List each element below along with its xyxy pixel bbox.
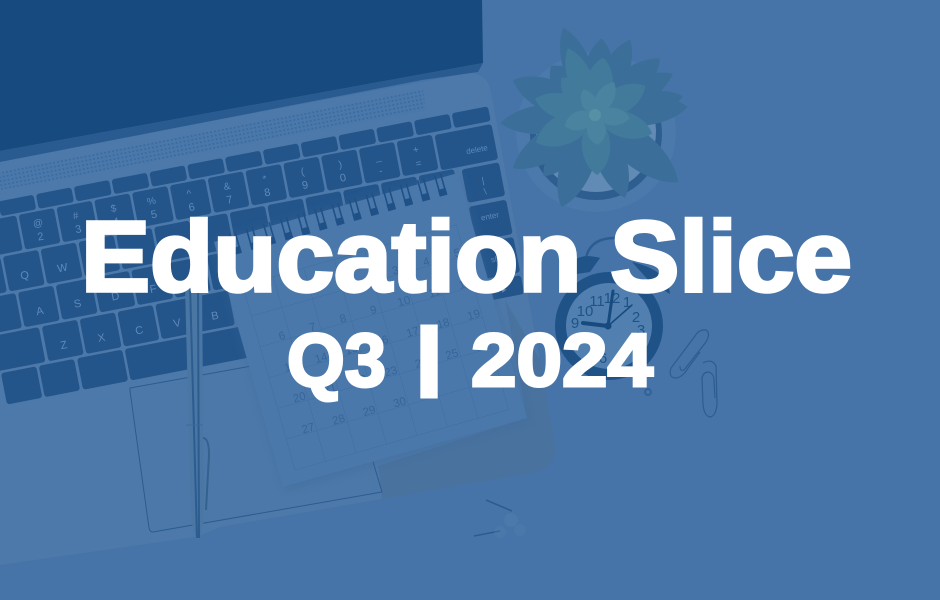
key labels: #: [72, 210, 80, 222]
push pins: [474, 500, 526, 538]
pin heads: [504, 513, 518, 527]
outer leaves: [499, 23, 689, 213]
middle leaves: [530, 44, 656, 175]
subtitle: 2024: [471, 318, 653, 402]
key labels: C: [134, 324, 144, 338]
key labels: 9: [301, 179, 309, 192]
key labels: ^: [186, 189, 193, 200]
leaf core: [589, 109, 601, 121]
key labels: +: [412, 144, 420, 156]
clock numerals: 12: [604, 290, 620, 307]
subtitle: |: [419, 316, 439, 395]
key labels: 6: [188, 201, 196, 214]
keyboard: [0, 106, 526, 414]
calendar grid and dates: 10: [396, 294, 412, 309]
calendar grid and dates: 20: [292, 391, 307, 406]
key labels: X: [97, 332, 107, 345]
key labels: E: [96, 255, 105, 268]
paperclip 1: [670, 330, 708, 378]
subtitle: Q3: [287, 318, 386, 402]
speaker grille: [0, 90, 426, 190]
key labels: \: [483, 186, 488, 197]
calendar grid and dates: 9: [369, 304, 378, 317]
calendar grid and dates: 26: [475, 339, 490, 354]
key labels: ): [338, 159, 343, 171]
calendar page: [214, 173, 527, 487]
paperclip 2: [702, 361, 717, 417]
calendar grid and dates: 19: [466, 308, 482, 323]
key labels: 4: [112, 216, 120, 229]
key labels: S: [73, 298, 82, 311]
clock numerals: 10: [577, 303, 593, 320]
key labels: |: [481, 175, 485, 186]
key labels: B: [210, 310, 220, 323]
clock face: [566, 283, 652, 369]
key labels: @: [32, 217, 44, 230]
clock hands: [583, 291, 632, 329]
clock foot: [645, 389, 651, 395]
key labels: =: [415, 158, 423, 170]
clock numerals: 1: [623, 294, 631, 311]
calendar grid and dates: 24: [414, 356, 430, 371]
trackpad: [130, 350, 382, 532]
key labels: A: [35, 305, 45, 318]
calendar grid and dates: 22: [353, 373, 368, 388]
key labels: &: [223, 181, 232, 193]
calendar grid and dates: 17: [405, 325, 421, 340]
calendar grid and dates: 14: [314, 351, 330, 366]
key labels: 3: [74, 223, 83, 236]
calendar grid and dates: 8: [338, 313, 348, 326]
key labels: %: [146, 196, 157, 208]
ring holes: [232, 188, 447, 255]
pen: [185, 285, 209, 539]
laptop: [0, 0, 555, 565]
calendar grid and dates: [243, 225, 509, 470]
pen clip: [203, 438, 209, 510]
calendar grid and dates: 16: [375, 334, 390, 349]
plant: [499, 23, 689, 213]
inner leaves: [562, 78, 631, 146]
calendar grid and dates: 6: [277, 330, 287, 343]
calendar grid and dates: 12: [457, 277, 473, 292]
key labels: 5: [150, 209, 158, 221]
calendar: [214, 173, 530, 491]
hinge: [0, 63, 483, 162]
paperclips: [670, 330, 717, 417]
pot: [516, 52, 676, 212]
clock numerals: 9: [571, 315, 579, 332]
key labels: D: [110, 290, 121, 304]
key labels: enter: [480, 210, 500, 223]
key labels: [10, 131, 516, 384]
subtitle: [287, 316, 653, 402]
pebbles: [536, 72, 656, 192]
calendar grid and dates: 13: [283, 360, 299, 375]
calendar grid and dates: 28: [331, 413, 347, 428]
clock numerals: [571, 290, 645, 367]
clock numerals: 11: [589, 293, 605, 310]
key labels: V: [172, 317, 183, 330]
clock body: [555, 272, 663, 380]
key labels: ▶: [502, 287, 508, 294]
key labels: -: [378, 166, 384, 177]
clock handle and bells: [586, 238, 646, 262]
calendar grid and dates: 5: [453, 247, 462, 260]
key labels: delete: [465, 143, 489, 156]
laptop lower shade: [378, 300, 555, 499]
calendar shadow: [214, 173, 530, 491]
key labels: Z: [59, 339, 69, 352]
key labels: *: [262, 174, 268, 186]
calendar grid and dates: 15: [344, 342, 360, 357]
key labels: (: [300, 167, 306, 178]
calendar grid and dates: 7: [308, 321, 317, 334]
title: Education Slice: [81, 201, 852, 313]
calendar grid and dates: 27: [301, 421, 316, 436]
key labels: 0: [339, 172, 347, 185]
key labels: F: [149, 283, 158, 296]
laptop body: [0, 73, 555, 565]
calendar grid and dates: 3: [391, 264, 400, 278]
key labels: $: [110, 203, 118, 215]
key labels: 7: [225, 194, 234, 207]
clock numerals: 3: [637, 322, 645, 339]
key labels: T: [162, 242, 171, 255]
key labels: W: [56, 261, 69, 275]
calendar grid and dates: 23: [383, 365, 399, 380]
key labels: R: [124, 249, 134, 262]
alarm clock: [555, 238, 670, 395]
calendar spiral rings: [228, 173, 447, 255]
key labels: shift: [490, 253, 507, 264]
key labels: 2: [37, 231, 45, 244]
key labels: _: [373, 152, 382, 164]
key labels: 8: [263, 187, 272, 199]
calendar grid and dates: 25: [444, 347, 460, 362]
key labels: Q: [19, 269, 31, 283]
clock numerals: 2: [632, 309, 640, 326]
calendar grid and dates: 11: [427, 286, 442, 301]
calendar grid and dates: 18: [436, 317, 451, 332]
clock numerals: 6: [599, 350, 607, 367]
calendar grid and dates: 29: [362, 404, 377, 419]
calendar grid and dates: 30: [392, 395, 408, 410]
calendar grid and dates: 21: [322, 382, 338, 397]
calendar grid and dates: 4: [422, 256, 432, 269]
laptop screen: [0, 0, 483, 151]
